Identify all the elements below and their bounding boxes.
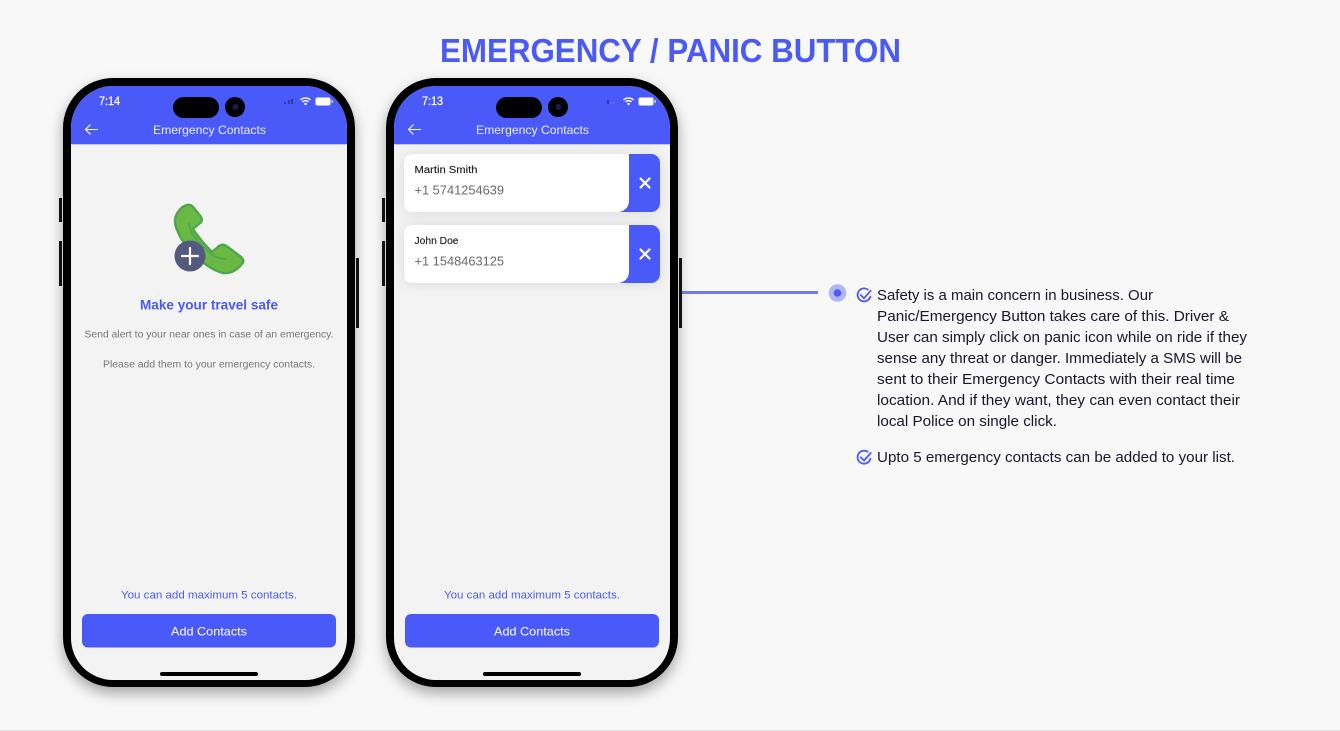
text: please add: Please add them to your emergency contacts.: [103, 360, 315, 370]
contact card: Martin Smith: [404, 154, 660, 213]
contact card: John Doe: John Doe: [414, 236, 459, 247]
text: safety description: User can simply click on panic icon while on ride if they: [877, 330, 1248, 346]
icon: back arrow: [86, 124, 98, 134]
text: safety description: sent to their Emergency Contacts with their real time: [877, 372, 1235, 388]
contact card: John Doe: [404, 225, 660, 284]
button: add contacts: [82, 614, 336, 648]
status bar: 7:13: [422, 96, 443, 108]
text: safety description: [877, 288, 1248, 430]
text: safety description: sense any threat or danger. Immediately a SMS will be: [877, 351, 1242, 367]
text: safety description: location. And if they want, they can even contact their: [877, 393, 1240, 409]
phone: empty emergency contacts screen: [59, 78, 359, 693]
home indicator: [483, 672, 581, 676]
text: safety description: Panic/Emergency Button takes care of this. Driver &: [877, 309, 1229, 325]
phone: saved emergency contacts screen: [382, 78, 682, 693]
icon: back arrow: [408, 124, 421, 134]
home indicator: [160, 672, 258, 676]
text: safety description: local Police on single click.: [877, 414, 1057, 430]
contact card: Martin Smith: +1 5741254639: [414, 184, 504, 198]
connector dot: [829, 284, 846, 302]
text: maximum contacts: You can add maximum 5 contacts.: [444, 590, 620, 602]
button: add contacts: [405, 614, 659, 648]
icon: check bullet 1: [858, 288, 871, 301]
connector line: [682, 291, 818, 294]
header title: Emergency Contacts: [153, 123, 266, 137]
contact card: John Doe: +1 1548463125: [414, 254, 504, 268]
text: contacts limit: Upto 5 emergency contacts can be added to your list.: [877, 450, 1235, 466]
button: add contacts: Add Contacts: [494, 624, 570, 638]
header title: Emergency Contacts: [476, 123, 589, 137]
heading: make your travel safe: Make your travel safe: [140, 298, 278, 312]
status bar: [99, 96, 333, 118]
contact card: Martin Smith: Martin Smith: [414, 165, 478, 176]
text: maximum contacts: You can add maximum 5 contacts.: [121, 590, 297, 602]
text: send alert: Send alert to your near ones in case of an emergency.: [84, 330, 334, 340]
title: EMERGENCY / PANIC BUTTON: [440, 32, 901, 69]
icon: check bullet 2: [858, 451, 871, 464]
status bar: [422, 96, 656, 118]
text: safety description: Safety is a main concern in business. Our: [877, 288, 1153, 304]
status bar: 7:14: [99, 96, 121, 108]
icon: green phone with plus badge: [174, 205, 243, 273]
button: add contacts: Add Contacts: [171, 624, 247, 638]
